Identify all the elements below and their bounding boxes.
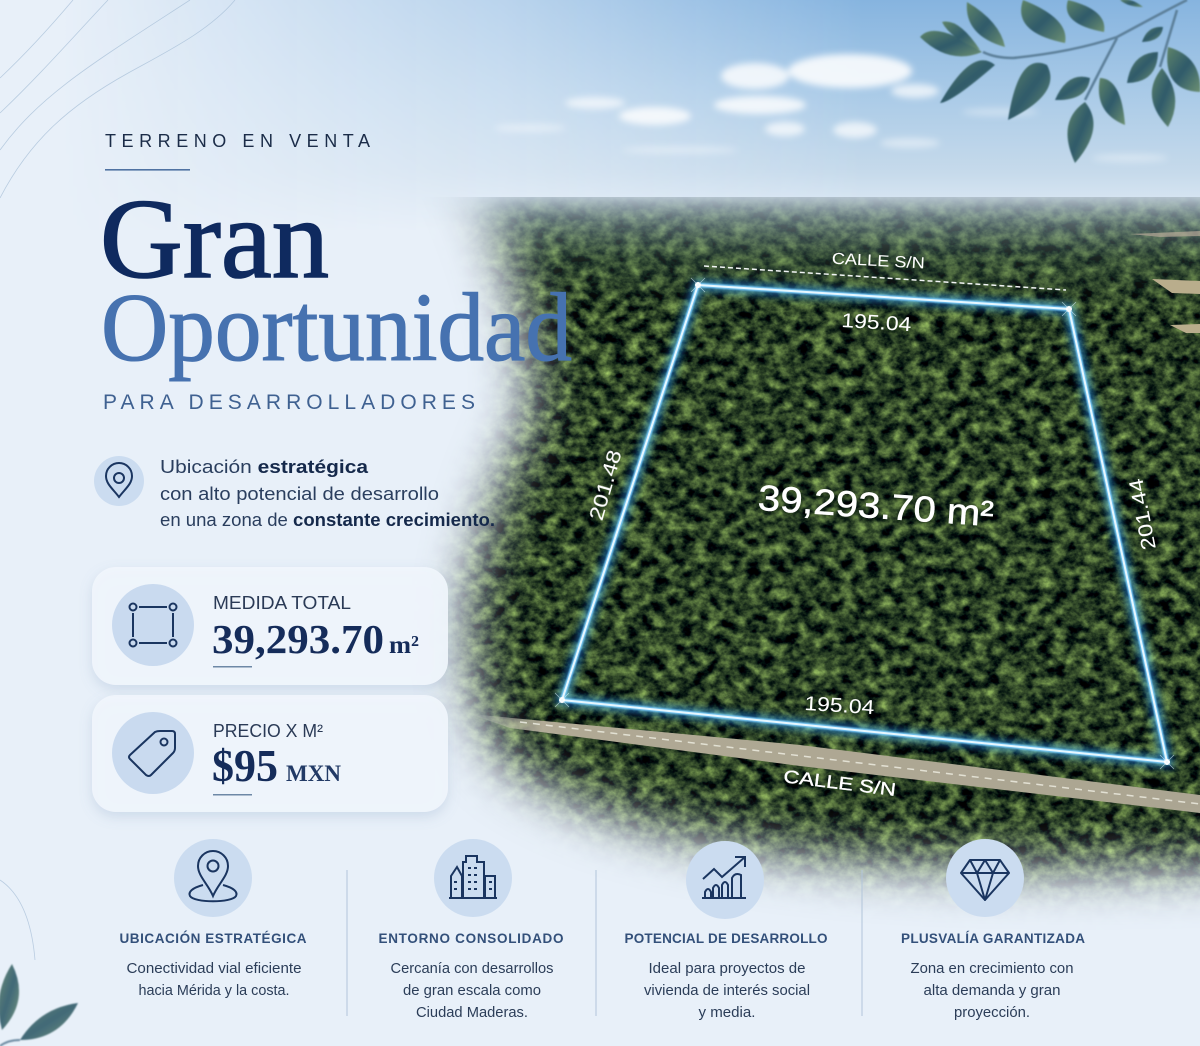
feature: potencial de desarrollo: vivienda de interés social [644,982,810,999]
card: precio [92,695,448,812]
kicker: terreno en venta: TERRENO EN VENTA [105,131,370,151]
plot boundary [555,278,1174,769]
feature: potencial de desarrollo: POTENCIAL DE DESARROLLO [624,931,828,946]
plot labels: CALLE S/N [831,251,925,272]
feature: plusvalia garantizada: proyección. [954,1004,1030,1021]
card: medida total: MEDIDA TOTAL [213,593,351,613]
card: medida total: 39,293.70 [212,616,384,662]
road [470,714,1200,813]
feature: entorno consolidado: de gran escala como [403,982,541,999]
feature: entorno consolidado: Cercanía con desarrollos [390,960,554,977]
plot labels: 195.04 [841,310,912,336]
leaves: bottom left [0,964,78,1046]
title: Gran [100,177,329,302]
intro with pin icon [94,456,495,530]
feature: potencial de desarrollo: Ideal para proyectos de [648,960,806,977]
title [100,177,572,381]
subtitle: PARA DESARROLLADORES [103,391,475,414]
feature: entorno consolidado: Ciudad Maderas. [416,1004,528,1021]
dividers [347,870,862,1016]
feature: entorno consolidado [378,839,564,1021]
plot labels: 195.04 [804,693,875,719]
feature: plusvalia garantizada: alta demanda y gran [924,982,1060,999]
leaves: top right branch [920,0,1200,163]
plot labels: 201.48 [586,448,627,523]
feature: plusvalia garantizada: PLUSVALÍA GARANTIZADA [901,931,1085,946]
intro with pin icon: Ubicación estratégica [160,456,369,477]
plot labels: 39,293.70 m² [757,477,995,534]
feature: ubicacion estrategica: Conectividad vial eficiente [126,960,302,977]
feature: ubicacion estrategica: hacia Mérida y la costa. [138,982,290,999]
intro with pin icon: con alto potencial de desarrollo [160,483,439,504]
feature: ubicacion estrategica: UBICACIÓN ESTRATÉGICA [120,931,307,946]
card: precio: PRECIO X M² [213,721,323,741]
feature: entorno consolidado: ENTORNO CONSOLIDADO [378,931,564,946]
feature: plusvalia garantizada [901,839,1085,1021]
distant clearings [1152,279,1200,294]
plot labels: 201.44 [1125,477,1161,552]
plot labels [586,251,1161,800]
feature: plusvalia garantizada: Zona en crecimiento con [910,960,1074,977]
card: precio: MXN [286,761,341,786]
background: sky and page [134,0,1200,198]
top street dashed line [704,266,1066,290]
card: medida total [92,567,448,685]
plot labels: CALLE S/N [782,766,897,800]
feature: ubicacion estrategica [120,839,307,999]
feature: potencial de desarrollo: y media. [698,1004,756,1021]
feature: potencial de desarrollo [624,841,828,1021]
intro with pin icon: en una zona de constante crecimiento. [160,509,495,530]
title: Oportunidad [101,274,572,381]
aerial land photo [433,197,1200,912]
card: precio: $95 [212,741,278,791]
card: medida total: m² [389,632,419,659]
decorative curves [0,0,235,960]
